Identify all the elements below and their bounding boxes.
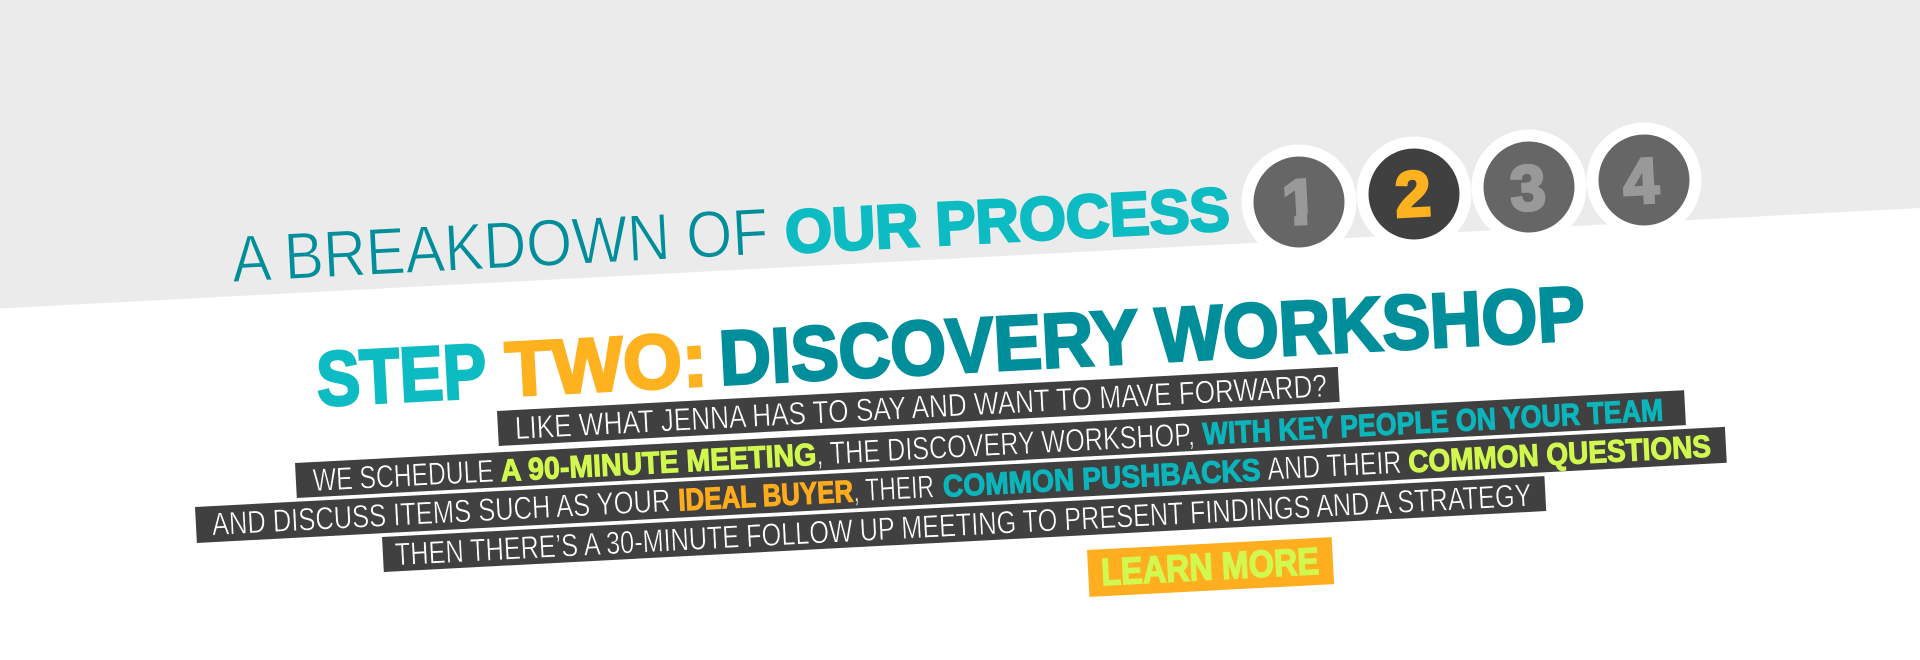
step circle 1: [1242, 144, 1356, 260]
text strip: line 4: [382, 476, 1546, 573]
heading: step two discovery workshop: [314, 271, 1587, 423]
text strip: line 3: [195, 427, 1727, 543]
step circle 3: [1472, 130, 1586, 244]
title: a breakdown of our process: A BREAKDOWN OF: [230, 194, 770, 296]
step circle 4: 4: [1621, 144, 1661, 218]
step circle 4: [1586, 122, 1702, 238]
step indicator: numbered circles: [1242, 122, 1702, 260]
text strip: line 2: [295, 390, 1686, 499]
text strip: line 1: LIKE WHAT JENNA HAS TO SAY AND WANT TO MAVE FORWARD?: [514, 368, 1328, 446]
text strip: line 2: A 90-MINUTE MEETING: [500, 437, 817, 488]
text strip: line 3: , THEIR: [852, 468, 935, 509]
text strip: line 3: AND THEIR: [1267, 444, 1402, 487]
text strip: line 2: WITH KEY PEOPLE ON YOUR TEAM: [1202, 392, 1664, 451]
text strip: line 4: THEN THERE’S A 30-MINUTE FOLLOW UP MEETING TO PRESENT FINDINGS AND A STRATEGY: [394, 477, 1532, 572]
text strip: line 3: COMMON QUESTIONS: [1407, 429, 1712, 479]
heading: step two discovery workshop: DISCOVERY: [717, 294, 1141, 402]
title: a breakdown of our process: OUR PROCESS: [783, 175, 1231, 266]
panel: grey header background: [0, 0, 1920, 308]
text strip: line 2: WE SCHEDULE: [312, 453, 495, 498]
text strip: line 3: IDEAL BUYER: [677, 474, 854, 518]
heading: step two discovery workshop: STEP: [314, 328, 489, 423]
step circle 1: 1: [1280, 165, 1320, 239]
text strip: line 2: , THE DISCOVERY WORKSHOP,: [815, 416, 1196, 472]
text strip: line 3: COMMON PUSHBACKS: [942, 452, 1261, 504]
heading: step two discovery workshop: WORKSHOP: [1153, 271, 1587, 379]
step circle 2, active: 2: [1393, 157, 1433, 231]
step circle 3: 3: [1508, 151, 1548, 225]
button: learn more: LEARN MORE: [1100, 541, 1320, 594]
title: a breakdown of our process: [230, 170, 1231, 296]
text strip: line 3: AND DISCUSS ITEMS SUCH AS YOUR: [211, 482, 671, 542]
heading: step two discovery workshop: TWO:: [503, 317, 709, 413]
step circle 2, active: [1356, 136, 1472, 252]
